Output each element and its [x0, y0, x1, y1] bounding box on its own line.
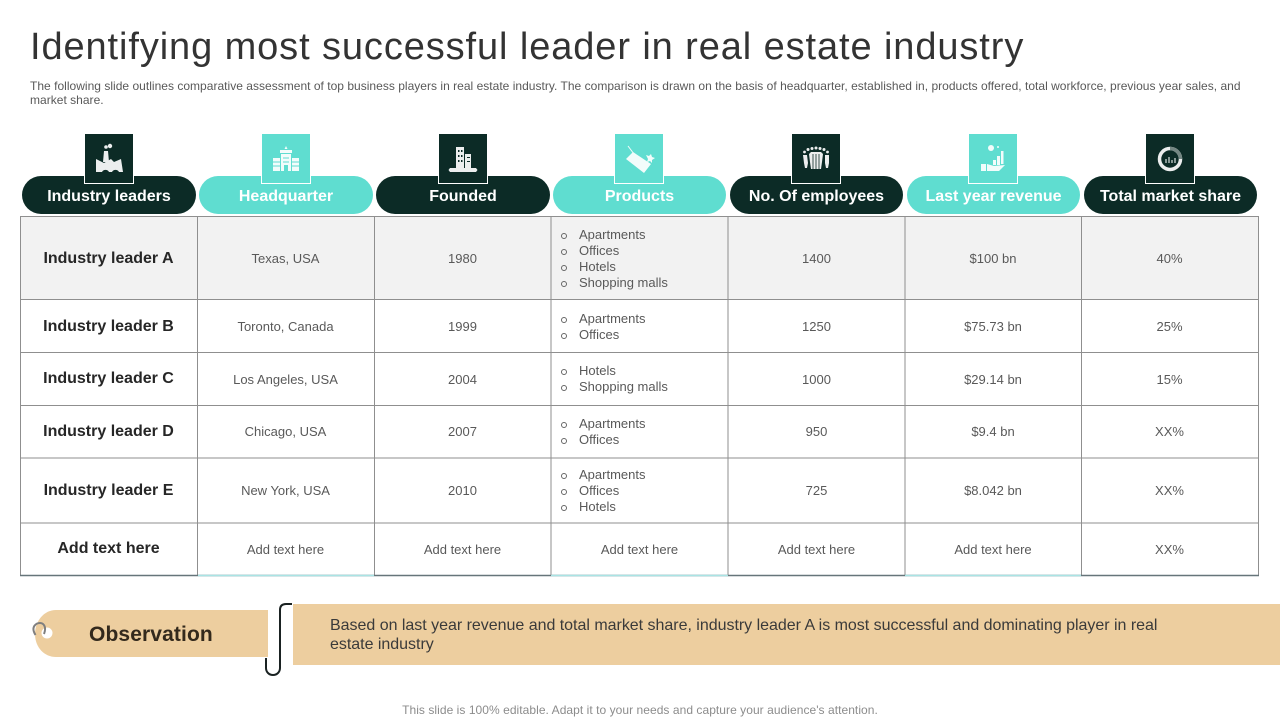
title: Identifying most successful leader in real estate industry — [30, 26, 1024, 68]
header: founded: Founded — [429, 188, 497, 205]
icon: market share donut — [1145, 134, 1195, 184]
observation text: Based on last year revenue and total market share, industry leader A is most successful and dominating player in real estate industry — [330, 617, 1157, 653]
row C founded: 2004 — [448, 372, 477, 386]
row B headquarter: Toronto, Canada — [237, 319, 334, 334]
header: market share: Total market share — [1100, 188, 1241, 205]
row D label: Industry leader D — [43, 422, 174, 440]
icon: group of employees — [791, 134, 841, 184]
row C products: Hotels — [579, 363, 616, 378]
row C products: Shopping malls — [579, 379, 668, 394]
header: revenue — [907, 176, 1080, 214]
row F founded: Add text here — [424, 542, 501, 556]
icon: revenue in hand — [968, 134, 1018, 184]
row A products: Shopping malls — [579, 275, 668, 290]
row E share: XX% — [1155, 483, 1184, 498]
row A share: 40% — [1156, 251, 1183, 266]
row A revenue: $100 bn — [970, 251, 1016, 266]
observation tag — [32, 610, 268, 657]
row D headquarter: Chicago, USA — [245, 424, 326, 439]
row E products: Offices — [579, 483, 619, 498]
footer note: This slide is 100% editable. Adapt it to your needs and capture your audience's attention. — [402, 703, 878, 717]
row A shading — [20, 216, 1259, 300]
header: employees: No. Of employees — [749, 188, 884, 205]
row F headquarter: Add text here — [247, 542, 324, 556]
row A products — [561, 227, 668, 290]
row C share: 15% — [1156, 372, 1183, 386]
row D products: Apartments — [579, 416, 645, 431]
row A employees: 1400 — [802, 251, 831, 266]
row D employees: 950 — [806, 424, 827, 439]
row E headquarter: New York, USA — [241, 483, 330, 498]
row B products — [561, 311, 645, 342]
row F products: Add text here — [601, 542, 678, 556]
row F revenue: Add text here — [954, 542, 1032, 556]
row F share: XX% — [1155, 542, 1184, 556]
row C label: Industry leader C — [43, 370, 174, 387]
header: headquarter — [199, 176, 373, 214]
row D share: XX% — [1155, 424, 1184, 439]
row B founded: 1999 — [448, 319, 477, 334]
row F employees: Add text here — [778, 542, 855, 556]
row B employees: 1250 — [802, 319, 831, 334]
header: industry leaders: Industry leaders — [47, 188, 171, 205]
row A founded: 1980 — [448, 251, 477, 266]
row A label: Industry leader A — [43, 250, 174, 266]
header: products: Products — [605, 188, 674, 205]
row A headquarter: Texas, USA — [252, 251, 319, 266]
row D revenue: $9.4 bn — [971, 424, 1015, 439]
header: revenue: Last year revenue — [925, 188, 1062, 205]
row B products: Apartments — [579, 311, 645, 326]
row F label: Add text here — [57, 540, 160, 557]
row C employees: 1000 — [802, 372, 831, 386]
row A products: Offices — [579, 243, 619, 258]
row B share: 25% — [1156, 319, 1183, 334]
header: industry leaders — [22, 176, 196, 214]
header: headquarter: Headquarter — [239, 188, 333, 205]
row E founded: 2010 — [448, 483, 477, 498]
bracket connector — [265, 603, 292, 676]
row B products: Offices — [579, 327, 619, 342]
row E products — [561, 467, 645, 514]
row C products — [561, 363, 668, 394]
row E products: Apartments — [579, 467, 645, 482]
row D products — [561, 416, 645, 447]
subtitle text: The following slide outlines comparative assessment of top business players in real estate industry. The comparison is drawn on the basis of headquarter, established in, products offered, total workforce, previous year sales, and market share. — [30, 79, 1241, 107]
header: employees — [730, 176, 903, 214]
comparison table — [20, 216, 1259, 576]
header: founded — [376, 176, 550, 214]
header: products — [553, 176, 726, 214]
row A products: Hotels — [579, 259, 616, 274]
icon: price tags — [614, 134, 664, 184]
row E label: Industry leader E — [44, 482, 173, 498]
row D founded: 2007 — [448, 424, 477, 439]
row C headquarter: Los Angeles, USA — [233, 372, 338, 386]
observation banner — [293, 604, 1280, 665]
icon: factory — [84, 134, 134, 184]
row B label: Industry leader B — [43, 318, 174, 334]
tag label: Observation — [89, 623, 213, 646]
row A products: Apartments — [579, 227, 645, 242]
tag body — [32, 610, 268, 657]
row D products: Offices — [579, 432, 619, 447]
icon: office building — [438, 134, 488, 184]
row E employees: 725 — [806, 483, 827, 498]
row E products: Hotels — [579, 499, 616, 514]
header: market share — [1084, 176, 1257, 214]
row E revenue: $8.042 bn — [964, 483, 1022, 498]
row B revenue: $75.73 bn — [964, 319, 1022, 334]
icon: headquarters building — [261, 134, 311, 184]
row C revenue: $29.14 bn — [964, 372, 1022, 386]
